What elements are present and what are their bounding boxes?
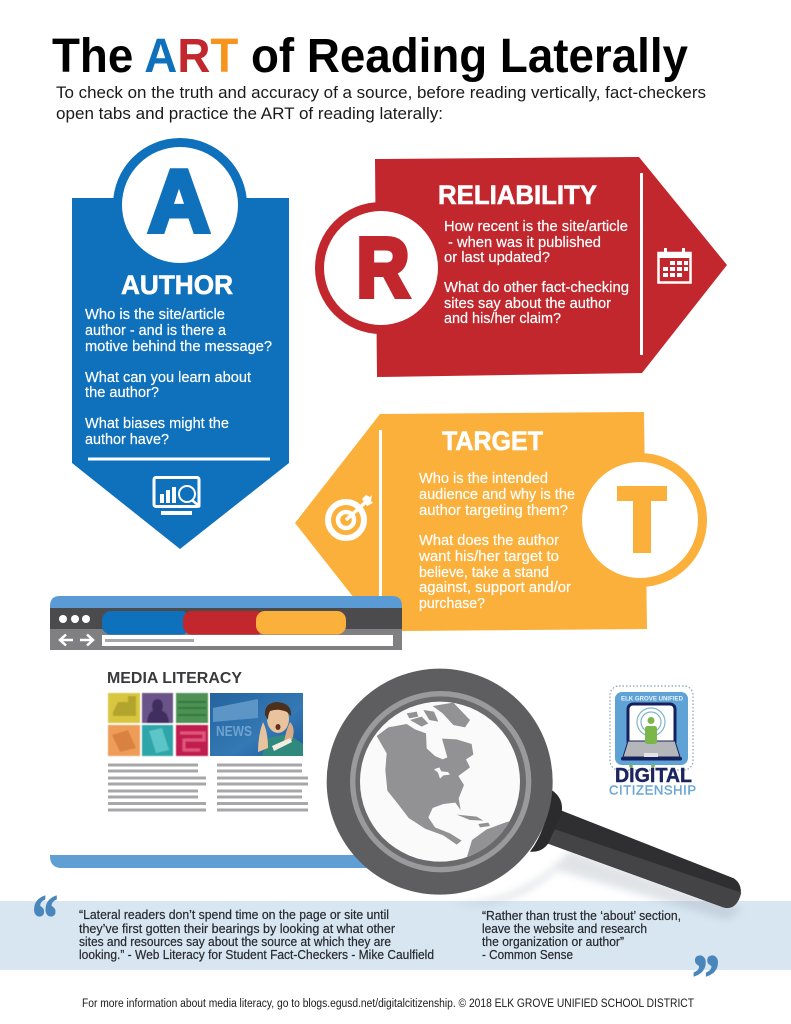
panel: author (72, 138, 289, 549)
breaking news illustration (210, 693, 303, 756)
reliability heading: RELIABILITY (438, 180, 597, 210)
quote: Common Sense (482, 909, 681, 962)
letter T (617, 486, 667, 553)
intro text: open tabs and practice the ART of reading laterally: (56, 104, 443, 123)
author questions (85, 306, 272, 448)
tab: blue (102, 611, 190, 634)
digital: DIGITAL (615, 765, 692, 787)
quote: Caulfield: they’ve first gotten their bearings by looking at what other (79, 922, 395, 936)
letter A: A (148, 152, 210, 250)
quote: Common Sense: the organization or author” (482, 935, 624, 949)
citizenship: CITIZENSHIP (609, 782, 696, 798)
target questions: want his/her target to (418, 548, 559, 565)
north america (377, 724, 473, 845)
quote: Caulfield: “Lateral readers don’t spend time on the page or site until (79, 908, 389, 922)
target heading: TARGET (442, 426, 543, 456)
globe (360, 702, 520, 862)
panel: target (295, 412, 707, 631)
quote: Caulfield (79, 908, 434, 962)
letter R: R (356, 220, 410, 314)
opening quotation mark: “ (32, 882, 58, 955)
man figure (258, 702, 303, 756)
window dots (59, 615, 90, 623)
breaking news illustration: NEWS (216, 723, 252, 740)
article text lines (108, 764, 308, 812)
author questions: What can you learn about (85, 369, 252, 386)
footer: For more information about media literacy, go to blogs.egusd.net/digitalcitizenship. © 2018 ELK GROVE UNIFIED SCHOOL DISTRICT (82, 998, 694, 1010)
navigation arrows (60, 634, 93, 646)
author questions: Who is the site/article (85, 306, 225, 323)
author questions: What biases might the (85, 415, 229, 432)
target questions: believe, take a stand (419, 564, 549, 581)
reliability questions (444, 218, 629, 327)
media literacy heading: MEDIA LITERACY (107, 670, 242, 687)
target questions: audience and why is the (419, 486, 575, 503)
south america (467, 822, 509, 857)
lens ring (327, 669, 553, 895)
target questions: purchase? (419, 595, 485, 612)
greenland (433, 703, 470, 727)
reliability questions: How recent is the site/article (444, 218, 628, 235)
caribbean (457, 815, 490, 827)
target questions: author targeting them? (419, 502, 568, 519)
icon: calendar (658, 248, 691, 282)
quote: Common Sense: leave the website and research (482, 922, 647, 936)
browser tab bar (50, 596, 402, 650)
arctic islands (407, 710, 438, 727)
author questions: motive behind the message? (85, 338, 272, 355)
intro text: To check on the truth and accuracy of a source, before reading vertically, fact-checkers (56, 83, 706, 102)
title: The ART of Reading Laterally (52, 30, 688, 83)
target questions (418, 470, 575, 612)
quote: Caulfield: looking.” - Web Literacy for Student Fact-Checkers - Mike Caulfield (79, 948, 434, 962)
reliability questions: and his/her claim? (444, 310, 561, 327)
logo: digital citizenship: ELK GROVE UNIFIED (621, 696, 683, 702)
target questions: Who is the intended (419, 470, 548, 487)
quote: Common Sense: “Rather than trust the ‘about’ section, (482, 909, 681, 923)
logo: digital citizenship (609, 686, 696, 798)
reliability questions: sites say about the author (444, 295, 611, 312)
magnifier handle (530, 790, 741, 908)
author heading: AUTHOR (121, 270, 233, 300)
reliability questions: - when was it published (448, 234, 601, 251)
tab: red (183, 611, 265, 634)
author questions: the author? (85, 384, 159, 401)
icon: monitor with magnifier (154, 478, 200, 515)
reliability questions: or last updated? (444, 249, 550, 266)
media tile images (108, 693, 208, 756)
quote: Caulfield: sites and resources say about the source at which they are (79, 935, 391, 949)
author questions: author have? (85, 431, 169, 448)
quote band (0, 901, 791, 970)
panel: reliability (315, 157, 727, 377)
author questions: author - and is there a (85, 322, 227, 339)
laptop (621, 704, 682, 760)
great lakes (434, 767, 450, 779)
intro text (56, 83, 706, 123)
icon: target with arrow (328, 495, 373, 538)
browser bottom bar (50, 855, 380, 868)
quote: Common Sense: - Common Sense (482, 948, 573, 962)
address bar (102, 635, 393, 646)
closing quotation mark: ” (692, 942, 720, 1015)
target questions: against, support and/or (419, 579, 571, 596)
tab: orange (256, 611, 346, 634)
reliability questions: What do other fact-checking (444, 279, 629, 296)
target questions: What does the author (419, 532, 559, 549)
magnifying glass (327, 669, 743, 920)
logo green dots (629, 764, 655, 768)
